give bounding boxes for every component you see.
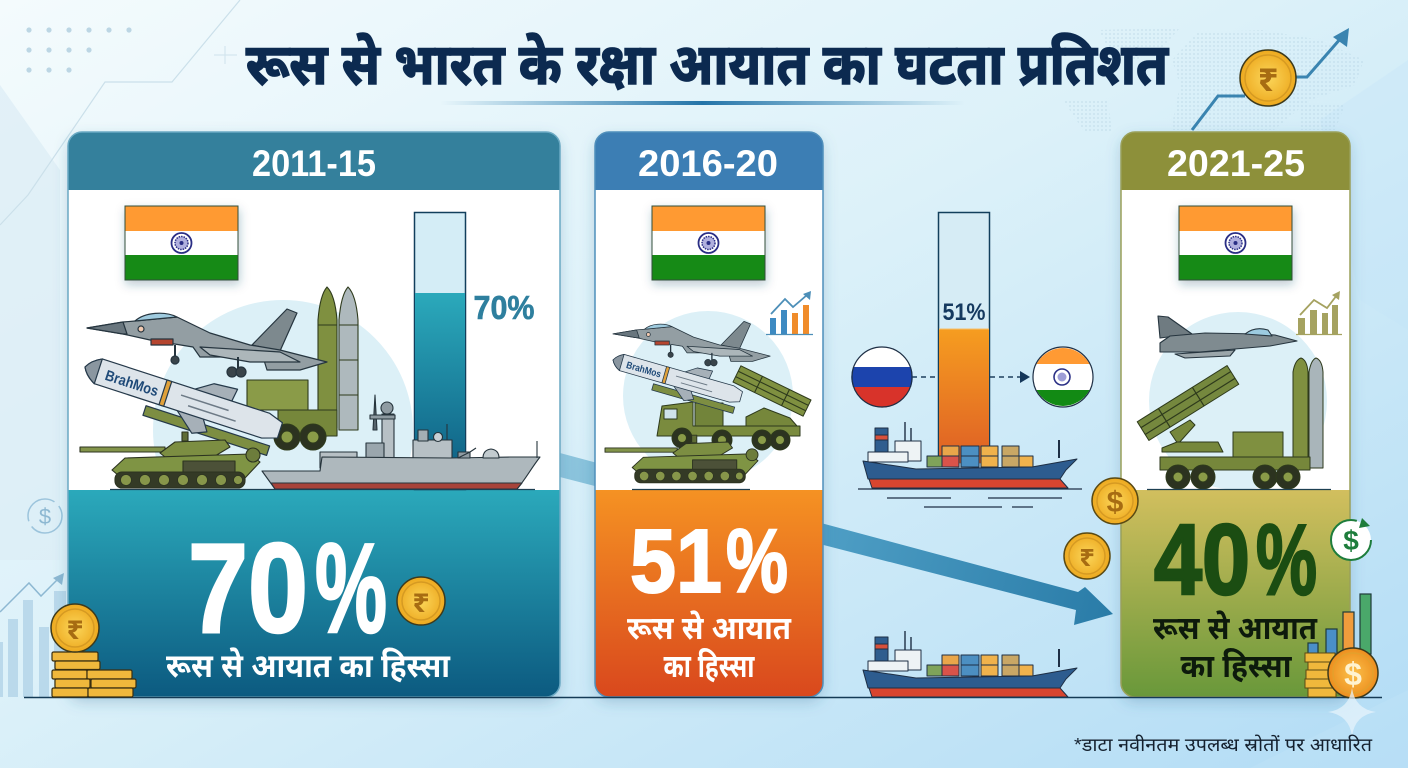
frigate <box>262 395 540 489</box>
flag: Russia <box>851 347 913 408</box>
ground line <box>110 488 535 490</box>
panel header <box>1121 132 1350 190</box>
bar label: 51%: 51% <box>942 299 986 326</box>
arrow: declining trend <box>556 453 1113 625</box>
title: रूस से भारत के रक्षा आयात का घटता प्रतिशत <box>246 32 1169 97</box>
figure: 40% <box>1154 504 1317 616</box>
panel: 2016-20 <box>595 132 823 697</box>
BrahMos missile: BrahMos <box>625 360 663 381</box>
caption: रूस से आयात <box>627 610 792 646</box>
heading: 2011-15: 2011-15 <box>252 143 376 184</box>
heading: 2016-20: 2016-20 <box>638 143 778 184</box>
decorative sparkle <box>1328 688 1376 736</box>
BrahMos missile: BrahMos <box>103 367 160 400</box>
icon: dollar cycle: $ <box>1343 525 1359 556</box>
fighter jet <box>613 321 770 366</box>
ground line <box>632 488 750 490</box>
panel border <box>595 132 823 697</box>
pale circle backdrop <box>1149 312 1327 490</box>
coin stack with bars and dollar coin: $ <box>1344 656 1362 692</box>
bar gauge: 51% <box>938 212 990 463</box>
figure: 40%: 40 <box>1154 504 1250 616</box>
percentage panel <box>595 490 823 697</box>
figure: 70%: 70 <box>188 517 308 659</box>
figure: 40%: % <box>1256 504 1317 616</box>
mini chart <box>1296 291 1342 334</box>
panel border <box>1121 132 1350 697</box>
BrahMos missile <box>608 344 746 415</box>
flag: India round <box>1033 347 1093 407</box>
fighter jet (delta) <box>1158 316 1297 358</box>
percentage panel <box>1121 490 1350 697</box>
coin: rupee: ₹ <box>1079 542 1095 572</box>
flag: India <box>652 206 765 280</box>
caption: रूस से आयात का हिस्सा <box>166 646 451 684</box>
background decoration: faint bar chart and dollar icon <box>0 499 66 697</box>
baseline <box>24 696 1382 698</box>
panel: 2011-15 <box>68 132 560 697</box>
military truck with missiles <box>247 287 358 450</box>
coin stack with rupee: ₹ <box>66 613 84 646</box>
coin stack with rupee <box>51 604 136 697</box>
caption <box>1153 610 1318 684</box>
tank <box>605 435 758 483</box>
bar gauge: 70% <box>414 212 466 490</box>
figure: 51%: 51 <box>630 512 722 612</box>
figure: 51% <box>630 512 788 612</box>
flag: India <box>125 206 238 280</box>
coin: dollar <box>1092 478 1138 524</box>
coin: dollar: $ <box>1107 486 1124 519</box>
panel header <box>68 132 560 190</box>
caption: का हिस्सा <box>1180 648 1292 684</box>
percentage panel <box>68 490 560 697</box>
cargo ship with containers <box>858 422 1082 507</box>
ground line <box>1147 488 1331 490</box>
panel: 2021-25 <box>1121 132 1350 697</box>
tank <box>80 432 260 488</box>
title underline <box>440 101 965 105</box>
background decoration: faint bar chart and dollar icon: $ <box>39 504 51 529</box>
dashed arrow Russia to India <box>912 371 1030 383</box>
launcher with missiles <box>1137 358 1323 489</box>
icon: rising line with rupee coin: ₹ <box>1258 58 1278 99</box>
caption: रूस से आयात <box>1153 610 1318 646</box>
pale circle backdrop <box>623 311 793 481</box>
flag: India <box>1179 206 1292 280</box>
figure: 70%: % <box>315 517 387 659</box>
figure: 51%: % <box>726 512 788 612</box>
launcher truck <box>657 366 811 450</box>
dotted world map <box>1063 28 1364 133</box>
coin stack with bars and dollar coin <box>1305 594 1378 698</box>
heading: 2021-25: 2021-25 <box>1167 143 1305 184</box>
icon: rising line with rupee coin <box>1192 28 1349 130</box>
coin: rupee: ₹ <box>412 586 430 619</box>
bar label: 70%: 70% <box>474 289 534 326</box>
mini chart <box>766 291 813 334</box>
icon: dollar cycle <box>1331 518 1371 560</box>
caption <box>627 610 792 684</box>
panel header <box>595 132 823 190</box>
coin: rupee <box>1064 533 1110 579</box>
BrahMos missile <box>76 342 288 459</box>
cargo ship, lower <box>863 631 1077 697</box>
fighter jet <box>87 309 327 377</box>
pale circle backdrop <box>153 300 413 489</box>
caption: का हिस्सा <box>664 648 755 684</box>
footnote: *डाटा नवीनतम उपलब्ध स्रोतों पर आधारित <box>1074 734 1373 755</box>
panel border <box>68 132 560 697</box>
coin: rupee <box>397 577 445 625</box>
